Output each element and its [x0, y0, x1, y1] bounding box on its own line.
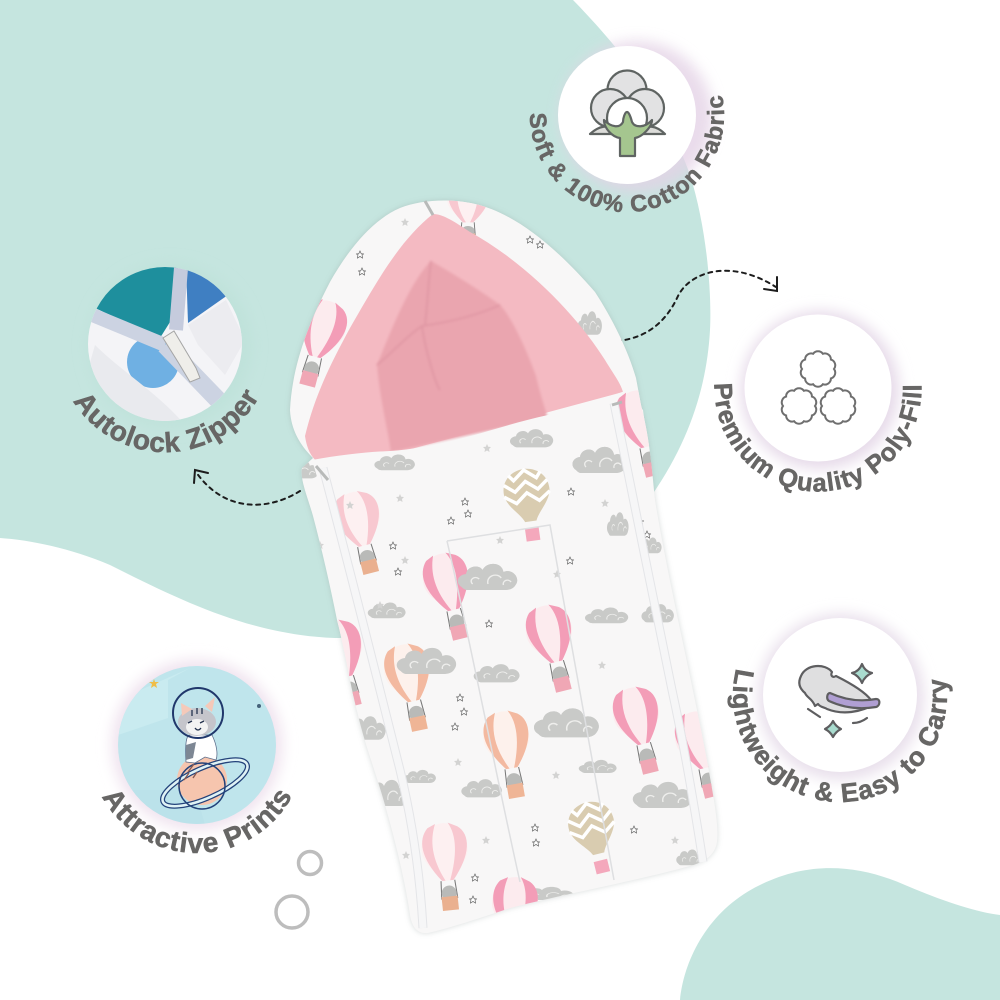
hood folds	[377, 261, 500, 390]
front panel top edge	[312, 391, 660, 560]
zipper curved label: Autolock Zipper	[72, 389, 257, 453]
hot air balloons	[336, 390, 714, 913]
icon: feather and sparkles	[799, 664, 879, 737]
stars	[316, 444, 679, 903]
arrow: to autolock zipper	[194, 470, 300, 505]
panel: attractive prints feature	[102, 656, 290, 854]
cotton curved label: Soft & 100% Cotton Fabric	[530, 96, 724, 212]
lightweight badge circle	[763, 618, 917, 772]
poly-fill curved label: Premium Quality Poly-Fill	[714, 384, 922, 494]
planet with ring	[160, 757, 250, 810]
bag shadow	[290, 201, 717, 933]
panel: soft cotton feature	[530, 36, 724, 212]
zipper halo	[88, 264, 252, 428]
clouds over balloons	[397, 447, 627, 737]
mint corner blob	[680, 868, 1000, 1000]
zipper photo	[85, 265, 245, 425]
poly-fill badge circle	[744, 314, 892, 462]
hood lining	[305, 214, 623, 462]
hood print, behind lining	[299, 200, 602, 478]
bag body	[290, 201, 717, 933]
panel: autolock zipper feature	[72, 267, 257, 453]
icon: three fibre balls	[782, 351, 855, 424]
product: baby sleeping bag	[288, 199, 720, 935]
right zipper	[614, 403, 703, 862]
panel: poly-fill feature	[714, 306, 922, 494]
lightweight halo	[758, 614, 924, 780]
hood inner back	[377, 261, 548, 452]
left zipper	[323, 468, 423, 928]
icon: cotton boll	[590, 70, 665, 156]
astronaut kitten	[173, 688, 223, 763]
prints halo	[112, 660, 282, 830]
lightweight curved label: Lightweight & Easy to Carry	[727, 670, 953, 802]
poly-fill halo	[741, 311, 899, 469]
cotton halo	[561, 41, 713, 193]
clouds	[348, 429, 703, 900]
prints photo	[115, 665, 280, 825]
panel: lightweight feature	[727, 610, 953, 802]
bag print pattern	[320, 390, 714, 913]
mint background blob	[0, 0, 710, 638]
center panel seams	[447, 525, 614, 882]
cotton badge circle	[558, 46, 696, 184]
prints curved label: Attractive Prints	[102, 790, 290, 854]
decorative ring large	[276, 896, 308, 928]
decorative ring small	[298, 852, 322, 874]
arrow: to poly-fill	[617, 271, 777, 341]
hood zipper pull	[316, 201, 622, 480]
